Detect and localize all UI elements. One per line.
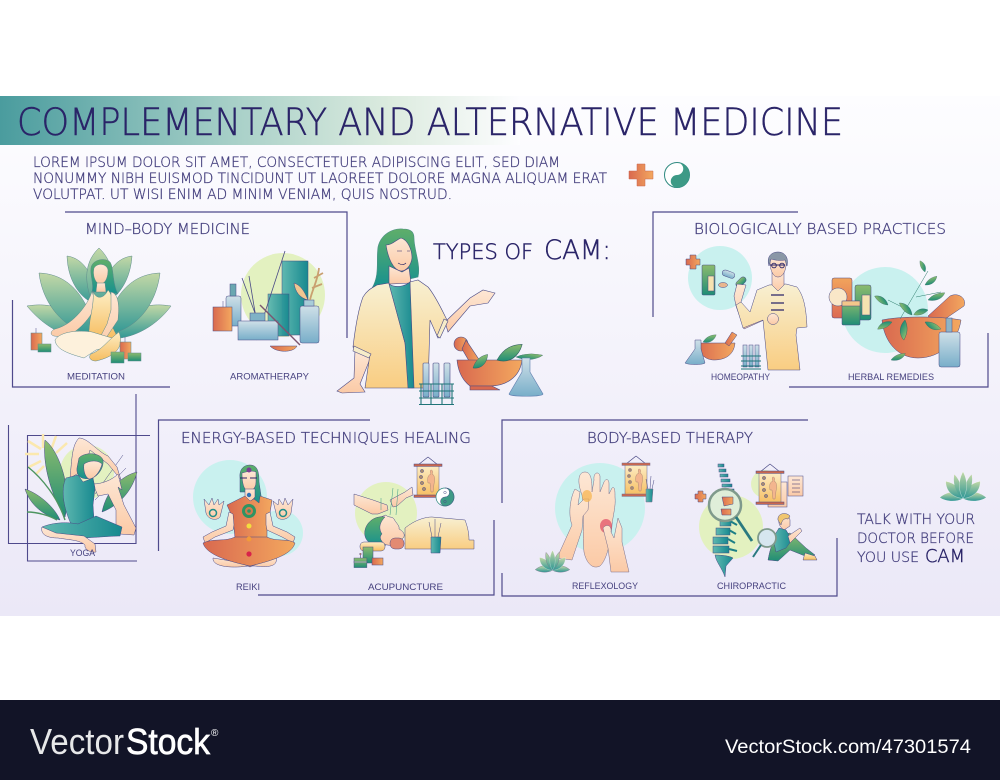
label: homeopathy: HOMEOPATHY: [711, 372, 771, 383]
icon: medical cross: [629, 164, 653, 186]
intro text block: NONUMMY NIBH EUISMOD TINCIDUNT UT LAOREET DOLORE MAGNA ALIQUAM ERAT: [33, 171, 607, 187]
heading: types of cam: TYPES OF: [433, 240, 533, 264]
illustration: yoga pose: [25, 434, 137, 552]
heading: types of cam: [433, 235, 611, 266]
label: chiropractic: CHIROPRACTIC: [717, 581, 786, 592]
heading: body-based therapy: BODY-BASED THERAPY: [587, 429, 754, 447]
callout: talk with your doctor: [857, 512, 975, 567]
label: reflexology: REFLEXOLOGY: [572, 581, 639, 592]
panel: yoga: [8, 394, 150, 561]
heading: mind-body: MIND–BODY MEDICINE: [85, 220, 250, 238]
footer logo: Stock: [126, 721, 211, 762]
footer bar: [0, 700, 1000, 780]
page background panel: [0, 96, 1000, 616]
illustration: doctor presenting: [337, 229, 543, 405]
title: COMPLEMENTARY AND ALTERNATIVE MEDICINE: [17, 101, 843, 144]
icon: lotus: [940, 472, 986, 501]
footer logo: [30, 721, 219, 762]
intro text block: [33, 155, 607, 203]
panel: biologically based practices: [653, 212, 988, 387]
heading: types of cam: CAM:: [544, 235, 611, 266]
panel: energy-based techniques healing: [158, 420, 494, 595]
callout: talk with your doctor: YOU USE: [857, 550, 919, 566]
icon: yin yang: [664, 162, 690, 188]
intro text block: LOREM IPSUM DOLOR SIT AMET, CONSECTETUER ADIPISCING ELIT, SED DIAM: [33, 155, 560, 171]
illustration: aromatherapy: [213, 251, 325, 351]
illustration: herbal remedies: [829, 261, 965, 367]
label: reiki: REIKI: [236, 582, 260, 593]
illustration: meditation: [27, 248, 171, 363]
intro text block: VOLUTPAT. UT WISI ENIM AD MINIM VENIAM, QUIS NOSTRUD.: [33, 187, 452, 203]
label: herbal remedies: HERBAL REMEDIES: [848, 372, 934, 383]
callout: talk with your doctor: DOCTOR BEFORE: [857, 531, 974, 547]
title band: [0, 96, 843, 145]
label: meditation: MEDITATION: [67, 372, 125, 382]
illustration: reflexology: [535, 456, 654, 572]
heading: biologically based practices: BIOLOGICALLY BASED PRACTICES: [694, 220, 946, 238]
heading: energy-based: ENERGY-BASED TECHNIQUES HEALING: [181, 429, 471, 447]
illustration: acupuncture: [354, 457, 474, 568]
callout: talk with your doctor: CAM: [925, 546, 965, 567]
label: acupuncture: ACUPUNCTURE: [368, 582, 443, 593]
footer logo: ®: [211, 728, 219, 739]
footer id: VectorStock.com/47301574: [725, 737, 971, 758]
label: yoga: YOGA: [70, 548, 96, 559]
footer logo: Vector: [30, 721, 124, 762]
illustration: chiropractic: [695, 464, 817, 577]
label: aromatherapy: AROMATHERAPY: [230, 372, 310, 382]
illustration: homeopathy: [685, 246, 807, 370]
panel: body-based therapy: [502, 420, 837, 596]
panel: mind-body medicine: [12, 212, 347, 387]
callout: talk with your doctor: TALK WITH YOUR: [857, 512, 975, 528]
illustration: reiki: [193, 460, 303, 567]
